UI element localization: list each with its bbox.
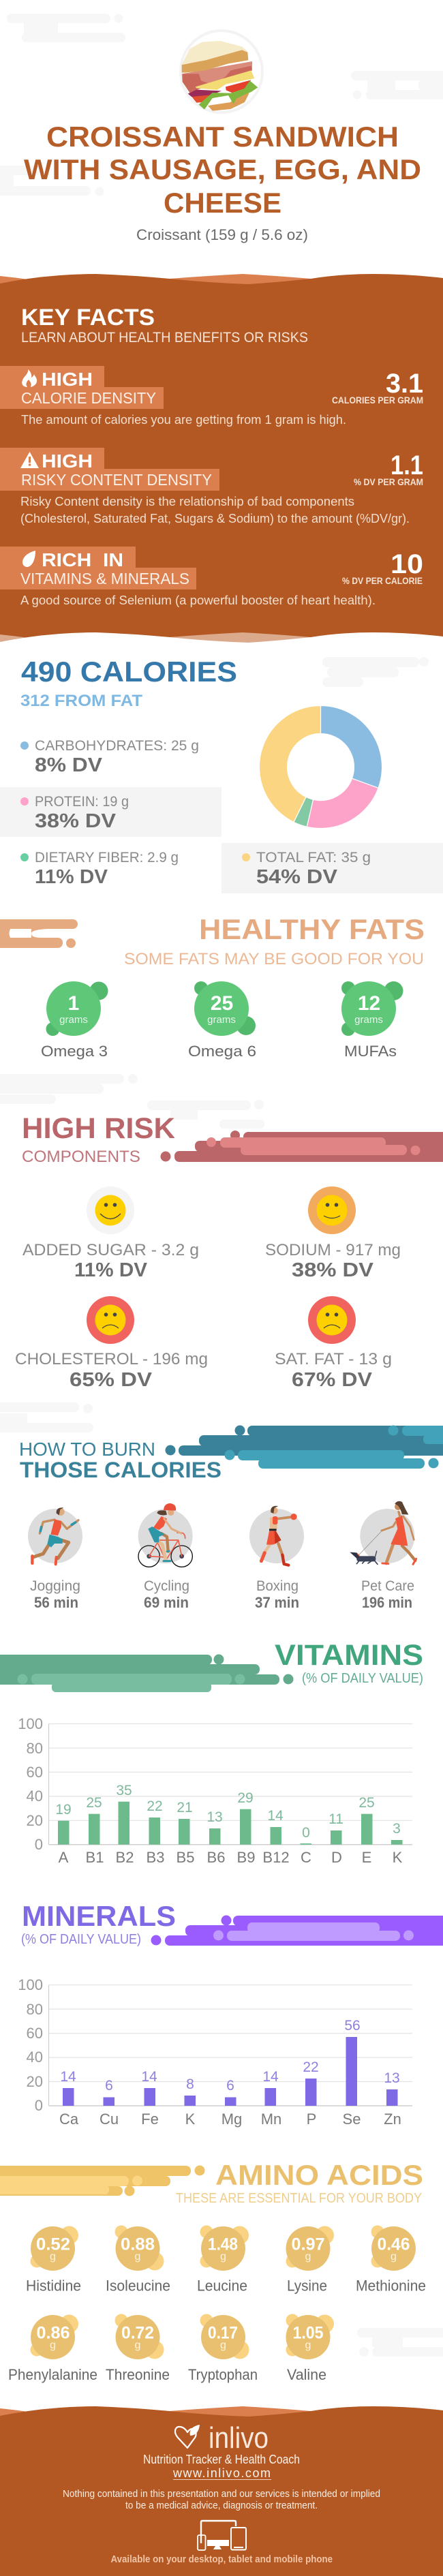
stat bubble: mufas: 12 [358,992,380,1015]
badge: high risky content density: RISKY CONTENT DENSITY [21,471,212,489]
bar chart: vitamins: 11 [329,1811,343,1827]
badge: rich in vitamins and minerals: VITAMINS & MINERALS [20,570,189,587]
legend item: protein: 38% DV [35,810,117,832]
risk item: saturated fat: 67% DV [292,1369,373,1391]
bar chart: vitamins: 13 [207,1809,223,1825]
text: disclaimer: Nothing contained in this presentation and our services is intended or implied [63,2488,380,2500]
activity: boxing: 37 min [255,1594,299,1611]
bar chart: minerals: Ca [59,2111,79,2128]
bar chart: minerals: Cu [100,2111,119,2128]
bar chart: minerals: 56 [344,2018,361,2034]
bar chart: minerals: Se [343,2111,361,2128]
bar chart: vitamins: K [393,1849,403,1866]
bar chart: minerals: Fe [141,2111,159,2128]
activity: pet care [350,1501,416,1611]
amino acid: leucine [197,2226,249,2294]
legend item: protein: PROTEIN: 19 g [35,794,129,810]
amino acid: histidine [26,2226,81,2294]
subheading: percent of daily value: (% OF DAILY VALUE) [302,1671,423,1686]
logo: inlivo [175,2421,269,2455]
title: CROISSANT SANDWICH [46,121,399,153]
risk item: added sugar: 11% DV [74,1259,148,1281]
stat: 10 % dv per calorie: 10 [391,549,423,579]
risk item: cholesterol [15,1296,208,1391]
icon: dog walker [350,1501,416,1564]
subheading: essential for your body: THESE ARE ESSENTIAL FOR YOUR BODY [176,2191,422,2206]
badge: rich in vitamins and minerals [0,547,196,589]
legend item: total fat: TOTAL FAT: 35 g [256,850,371,865]
subtitle: serving size: Croissant (159 g / 5.6 oz) [136,226,308,243]
activity: pet care: Pet Care [361,1578,414,1594]
stat bubble: mufas: grams [354,1014,383,1026]
bar chart: minerals: 40 [27,2049,43,2066]
bar chart: vitamins: 100 [18,1715,43,1732]
amino acid: phenylalanine: 0.86 [37,2324,70,2343]
amino acid: phenylalanine [8,2314,97,2383]
heading: minerals: MINERALS [22,1900,176,1932]
bar chart: minerals: 100 [18,1976,43,1993]
title: WITH SAUSAGE, EGG, AND [24,153,421,185]
risk item: sodium: 38% DV [292,1259,374,1281]
bar chart: vitamins [18,1715,412,1866]
amino acid: threonine: Threonine [106,2366,170,2383]
stat: 10 % dv per calorie [342,549,423,586]
activity: jogging: 56 min [34,1594,78,1611]
legend item: carbohydrates [20,738,199,776]
stat bubble: omega 6: grams [207,1014,236,1026]
text: availability: Available on your desktop, tablet and mobile phone [110,2554,333,2565]
legend item: protein [20,794,129,832]
amino acid: tryptophan: g [220,2340,226,2351]
amino acid: lysine [286,2226,334,2294]
amino acid: phenylalanine: Phenylalanine [8,2366,97,2383]
risk item: added sugar [22,1186,199,1281]
link: website: www.inlivo.com [172,2466,271,2480]
bar chart: vitamins: 22 [147,1798,163,1814]
bar chart: minerals: 80 [27,2001,43,2018]
bar chart: minerals: Zn [384,2111,401,2128]
text: risky content description: (Cholesterol, Saturated Fat, Sugars & Sodium) to the amount (%DV/gr). [20,512,410,525]
stat bubble: omega 3 [41,981,108,1060]
amino acid: leucine: 1.48 [208,2235,238,2254]
icon: cyclist [138,1503,193,1567]
bar chart: vitamins: 29 [237,1790,254,1806]
stat bubble: omega 6: Omega 6 [188,1043,256,1060]
amino acid: isoleucine: g [135,2251,140,2263]
bar chart: minerals: 14 [141,2069,157,2085]
bar chart: vitamins: 25 [86,1795,102,1811]
banner decoration: vitamins [0,1655,293,1692]
legend item: carbohydrates: 8% DV [35,754,103,776]
heading: amino acids: AMINO ACIDS [215,2159,423,2191]
risk item: saturated fat: SAT. FAT - 13 g [275,1350,392,1368]
icon: warning triangle [20,452,39,468]
badge: high calorie density: CALORIE DENSITY [21,389,156,407]
amino acid: leucine: g [220,2251,226,2263]
amino acid: threonine: g [135,2340,140,2351]
bar chart: vitamins: B12 [262,1849,290,1866]
amino acid: threonine: 0.72 [121,2324,154,2343]
bar chart: vitamins: B3 [147,1849,164,1866]
amino acid: methionine: g [391,2251,397,2263]
bar chart: minerals: 22 [303,2059,319,2075]
amino acid: tryptophan: Tryptophan [188,2366,258,2383]
heading: how to burn those calories: HOW TO BURN [19,1439,155,1460]
bar chart: minerals: K [185,2111,196,2128]
stat: 3.1 calories per gram: CALORIES PER GRAM [332,395,423,405]
bar chart: vitamins: 3 [393,1821,401,1837]
stat: 1.1 % dv per gram: % DV PER GRAM [354,477,423,487]
stat bubble: omega 3: 1 [68,992,79,1015]
icon: leaf [22,551,35,567]
bar chart: vitamins: E [362,1849,371,1866]
bar chart: vitamins: 60 [27,1764,43,1781]
heading: how to burn those calories [19,1439,222,1482]
stat: 1.1 % dv per gram: 1.1 [391,450,423,480]
amino acid: phenylalanine: g [50,2340,56,2351]
donut chart: calorie sources [259,706,382,829]
banner decoration: healthy fats [0,919,78,948]
bar chart: vitamins: 25 [358,1795,375,1811]
bar chart: vitamins: B1 [86,1849,104,1866]
amino acid: methionine [356,2226,426,2294]
activity: jogging [28,1507,82,1611]
legend item: dietary fiber: DIETARY FIBER: 2.9 g [35,850,179,865]
amino acid: valine [286,2314,334,2383]
bar chart: minerals: 14 [262,2069,279,2085]
risk item: added sugar: ADDED SUGAR - 3.2 g [22,1241,199,1259]
bar chart: vitamins: 40 [27,1788,43,1805]
title [24,121,421,219]
legend item: total fat: 54% DV [256,866,338,888]
stat bubble: mufas [341,981,403,1060]
badge: high calorie density [0,366,164,409]
badge: rich in vitamins and minerals: RICH IN [42,549,123,570]
legend item: carbohydrates: CARBOHYDRATES: 25 g [35,738,199,754]
bar chart: minerals [18,1976,412,2128]
heading: healthy fats: HEALTHY FATS [199,913,425,945]
activity: pet care: 196 min [362,1594,412,1611]
subheading: some fats may be good: SOME FATS MAY BE GOOD FOR YOU [124,950,424,968]
bar chart: vitamins: 0 [35,1836,43,1853]
amino acid: methionine: 0.46 [378,2235,410,2254]
bar chart: vitamins: C [301,1849,311,1866]
bar chart: vitamins: 14 [267,1808,284,1824]
bar chart: vitamins: 19 [55,1802,72,1818]
bar chart: vitamins: B6 [207,1849,225,1866]
amino acid: histidine: Histidine [26,2278,81,2294]
amino acid: histidine: 0.52 [36,2235,70,2254]
heading: vitamins: VITAMINS [275,1639,423,1672]
risk item: sodium: SODIUM - 917 mg [265,1241,401,1259]
bar chart: minerals: Mg [222,2111,242,2128]
subheading: percent of daily value: (% OF DAILY VALUE) [21,1932,141,1947]
heading: key facts: KEY FACTS [21,305,155,331]
bar chart: minerals: 6 [226,2078,234,2094]
stat bubble: omega 6 [188,981,256,1060]
heading: 490 calories: 490 CALORIES [21,656,237,688]
bar chart: vitamins: 20 [27,1812,43,1829]
badge: high calorie density: HIGH [42,369,93,390]
hero image: sandwich [181,31,262,112]
text: disclaimer: to be a medical advice, diagnosis or treatment. [125,2500,318,2511]
icon: devices [198,2521,246,2550]
panel: key facts [0,274,443,647]
amino acid: threonine [106,2314,170,2383]
risk item: cholesterol: 65% DV [70,1369,153,1391]
text: risky content description: Risky Content density is the relationship of bad components [20,495,354,508]
icon: flame [22,369,37,387]
amino acid: lysine: 0.97 [292,2235,324,2254]
text: tagline: Nutrition Tracker & Health Coach [143,2453,300,2466]
bar chart: minerals: 0 [35,2097,43,2114]
heading: high risk: HIGH RISK [22,1112,175,1145]
legend item: total fat [242,850,371,888]
banner decoration: how to burn [165,1426,443,1469]
stat: 1.1 % dv per gram [354,450,423,487]
bar chart: vitamins: B9 [237,1849,255,1866]
text: risky content description [20,495,410,525]
amino acid: methionine: Methionine [356,2278,426,2294]
bar chart: minerals: 60 [27,2025,43,2042]
legend item: dietary fiber: 11% DV [35,866,108,888]
activity: boxing: Boxing [256,1578,299,1594]
subheading: components: COMPONENTS [22,1148,140,1166]
amino acid: tryptophan: 0.17 [208,2324,238,2343]
activity: cycling [138,1503,193,1611]
panel: footer [0,2406,443,2576]
badge: high risky content density [0,448,219,491]
stat: 10 % dv per calorie: % DV PER CALORIE [342,576,423,586]
activity: boxing [249,1506,304,1611]
logo: inlivo: inlivo [209,2421,269,2455]
subheading: key facts: LEARN ABOUT HEALTH BENEFITS OR RISKS [21,330,308,346]
badge: high risky content density: HIGH [42,450,93,472]
risk item: sodium [265,1186,401,1281]
stat: 3.1 calories per gram: 3.1 [386,369,423,399]
bar chart: vitamins: 0 [302,1825,310,1841]
bar chart: minerals: P [307,2111,316,2128]
amino acid: tryptophan [188,2314,258,2383]
amino acid: histidine: g [50,2251,56,2263]
bar chart: vitamins: 80 [27,1740,43,1757]
activity: cycling: Cycling [144,1578,189,1594]
stat bubble: omega 3: grams [59,1014,88,1026]
bar chart: minerals: 14 [60,2069,76,2085]
stat bubble: omega 6: 25 [211,992,233,1015]
bar chart: minerals: 20 [27,2073,43,2090]
amino acid: valine: g [305,2340,311,2351]
amino acid: isoleucine [106,2226,170,2294]
amino acid: valine: 1.05 [293,2324,324,2343]
text: calorie density description: The amount of calories you are getting from 1 gram is high. [21,413,346,427]
banner decoration: amino acids [0,2166,204,2196]
stat bubble: mufas: MUFAs [344,1043,397,1060]
bar chart: minerals: 13 [384,2070,400,2086]
icon: runner [28,1507,82,1564]
legend item: dietary fiber [20,850,179,888]
legend: macronutrients [0,738,443,893]
icon: boxer [249,1506,304,1565]
activity: jogging: Jogging [30,1578,80,1594]
bar chart: vitamins: B2 [116,1849,134,1866]
banner decoration: high risk [161,1131,443,1162]
amino acid: lysine: Lysine [287,2278,327,2294]
text: selenium description: A good source of Selenium (a powerful booster of heart health). [20,594,376,607]
amino acid: valine: Valine [287,2366,326,2383]
amino acid: isoleucine: 0.88 [121,2235,155,2254]
banner decoration: minerals [151,1915,443,1946]
bar chart: minerals: 6 [105,2078,113,2094]
title: CHEESE [164,187,281,219]
heading: how to burn those calories: THOSE CALORIES [20,1458,222,1482]
risk item: cholesterol: CHOLESTEROL - 196 mg [15,1350,208,1368]
bar chart: vitamins: D [331,1849,342,1866]
bar chart: minerals: Mn [261,2111,281,2128]
amino acid: leucine: Leucine [197,2278,247,2294]
bar chart: vitamins: A [59,1849,69,1866]
bar chart: vitamins: B5 [177,1849,194,1866]
bar chart: vitamins: 35 [116,1783,132,1798]
bar chart: minerals: 8 [186,2076,194,2092]
risk item: saturated fat [275,1296,392,1391]
bar chart: vitamins: 21 [177,1800,193,1815]
subheading: 312 from fat: 312 FROM FAT [20,692,142,710]
text: disclaimer [63,2488,380,2511]
stat: 3.1 calories per gram [332,369,423,405]
stat bubble: omega 3: Omega 3 [41,1043,108,1060]
amino acid: isoleucine: Isoleucine [106,2278,170,2294]
amino acid: lysine: g [305,2251,311,2263]
activity: cycling: 69 min [144,1594,189,1611]
